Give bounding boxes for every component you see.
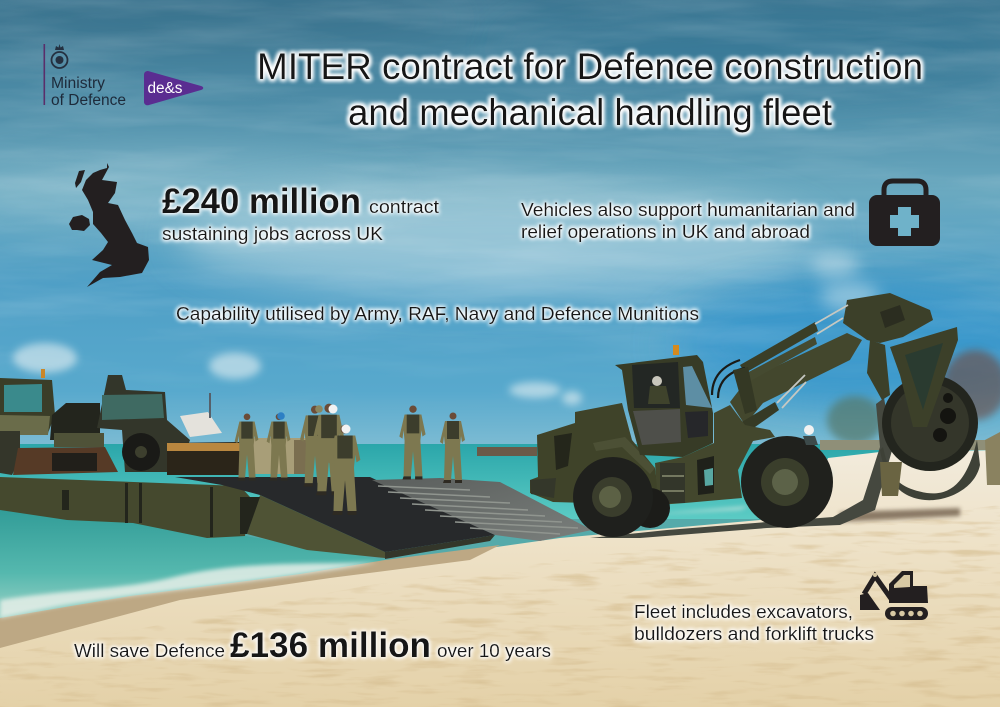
- chassis and front fender: [655, 405, 775, 505]
- rear wheel: [573, 457, 653, 537]
- icon: medical bag: [869, 181, 940, 246]
- operator behind drum: [880, 462, 902, 496]
- shallow water: [0, 505, 385, 618]
- stat: £240 million contract: contract: [369, 197, 439, 217]
- rear vehicles and cargo: [0, 369, 308, 475]
- wet sand: [0, 545, 500, 648]
- divider: [44, 44, 45, 105]
- text: humanitarian support: [521, 200, 855, 242]
- vehicle: left digger: [0, 378, 55, 433]
- stat: £240 million contract: [162, 182, 439, 244]
- wordmark: Ministry: [51, 75, 105, 92]
- boom: [730, 333, 862, 425]
- pontoon side: [0, 477, 250, 538]
- pontoon joins: [62, 483, 260, 537]
- title: [257, 45, 923, 133]
- rear axle: [630, 488, 670, 528]
- icon: royal crest: [52, 44, 68, 68]
- title: MITER contract for Defence construction: [257, 45, 923, 87]
- title: and mechanical handling fleet: [348, 91, 833, 133]
- pale wet shore under loader: [640, 470, 835, 515]
- beach sand: [0, 450, 1000, 707]
- sea: [0, 444, 1000, 519]
- text: humanitarian support: relief operations in UK and abroad: [521, 222, 810, 242]
- beacon: [673, 345, 679, 355]
- icon: excavator: [860, 571, 928, 620]
- logo: de&s: de&s: [148, 80, 183, 97]
- track mat on ground: [590, 398, 893, 538]
- lower ram: [740, 402, 779, 432]
- text: humanitarian support: Vehicles also support humanitarian and: [521, 200, 855, 220]
- driver: [652, 376, 662, 386]
- stat: saves £136 million: Will save Defence: [74, 641, 225, 661]
- text: fleet contents: [634, 602, 874, 644]
- cab: [615, 355, 713, 457]
- text: fleet contents: bulldozers and forklift trucks: [634, 624, 874, 644]
- wooden platform: [167, 442, 240, 475]
- stat: saves £136 million: over 10 years: [437, 641, 551, 661]
- drum: [882, 375, 978, 471]
- soldiers on the ramp: [235, 404, 465, 515]
- hoses: [712, 360, 745, 398]
- stat: £240 million contract: £240 million: [162, 182, 361, 221]
- dark deck: [175, 477, 495, 552]
- stat: £240 million contract: sustaining jobs across UK: [162, 224, 383, 244]
- ground shadow: [840, 508, 960, 522]
- ground worker: [804, 425, 814, 435]
- logo: de&s: [144, 71, 203, 105]
- pallets of cargo: [250, 438, 308, 474]
- pontoon and landing ramp: [0, 477, 592, 559]
- vehicle: middle digger: [50, 403, 100, 440]
- surf foam: [0, 562, 378, 618]
- distant jetty: [477, 447, 537, 456]
- logo: Ministry of Defence: of Defence: [51, 92, 126, 109]
- text: fleet contents: Fleet includes excavators,: [634, 602, 853, 622]
- logo: Ministry of Defence: [44, 44, 126, 109]
- icon: UK map: [69, 163, 149, 287]
- vehicle: second digger: [97, 375, 190, 472]
- attachment frame: [843, 293, 958, 427]
- sky: [0, 0, 1000, 460]
- clouds near horizon: [13, 343, 582, 405]
- loader vehicle: [530, 293, 1000, 538]
- rear hood: [530, 403, 660, 505]
- text: capability users: Capability utilised by Army, RAF, Navy and Defence Munitions: [176, 304, 699, 324]
- grey ramp: [372, 478, 592, 541]
- stat: saves £136 million: £136 million: [230, 626, 431, 665]
- front wheel: [741, 436, 833, 528]
- stat: saves £136 million: [74, 626, 551, 665]
- boat: [180, 412, 222, 437]
- shoreline trees: [820, 350, 1000, 450]
